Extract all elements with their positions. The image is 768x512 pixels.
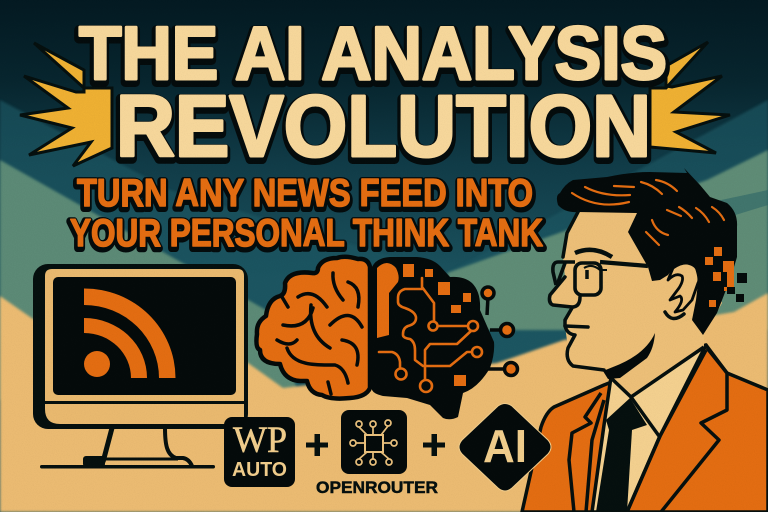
subtitle: [69, 172, 544, 257]
logo: WP Auto: WP: [233, 420, 287, 461]
head: [550, 205, 722, 370]
title: REVOLUTION: [115, 81, 652, 178]
title: THE AI ANALYSIS: [78, 14, 668, 98]
logo: AI diamond: AI: [483, 420, 527, 472]
logo: AI diamond: [459, 404, 551, 491]
starburst right: [650, 42, 730, 153]
ear: [668, 263, 699, 312]
subtitle: YOUR PERSONAL THINK TANK: [70, 212, 543, 255]
plus sign: [423, 434, 445, 456]
logo: OpenRouter: [316, 410, 438, 497]
pixel dissolve: [705, 247, 747, 307]
title: REVOLUTION: [116, 78, 651, 175]
shirt: [592, 345, 706, 512]
monitor stand: [103, 428, 192, 466]
necktie: [596, 398, 647, 512]
jacket: [522, 345, 768, 512]
brain organic hemisphere: [256, 257, 370, 399]
plus sign: [306, 434, 328, 456]
icon: brain half organic half circuit: [256, 257, 518, 419]
person in orange jacket: [522, 168, 768, 512]
icon: monitor with RSS feed: [33, 264, 248, 468]
eyebrow: [575, 250, 612, 257]
jaw shadow: [603, 333, 655, 379]
subtitle: TURN ANY NEWS FEED INTO: [77, 172, 533, 215]
logo: OpenRouter: OPENROUTER: [316, 478, 438, 497]
hair highlights: [572, 180, 724, 245]
monitor body: [33, 264, 248, 429]
title: THE AI ANALYSIS: [79, 11, 667, 95]
title: [78, 11, 668, 178]
logo: WP Auto: AUTO: [232, 459, 287, 481]
subtitle: TURN ANY NEWS FEED INTO: [76, 174, 534, 217]
RSS symbol: [84, 288, 176, 378]
face outline: [549, 212, 684, 370]
starburst left: [20, 43, 112, 166]
subtitle: YOUR PERSONAL THINK TANK: [69, 214, 544, 257]
logo: WP Auto: [224, 417, 295, 487]
neck: [604, 318, 704, 397]
lapels: [569, 348, 727, 512]
brain circuit hemisphere: [372, 257, 518, 419]
glasses: [553, 262, 648, 295]
hair: [557, 168, 737, 335]
